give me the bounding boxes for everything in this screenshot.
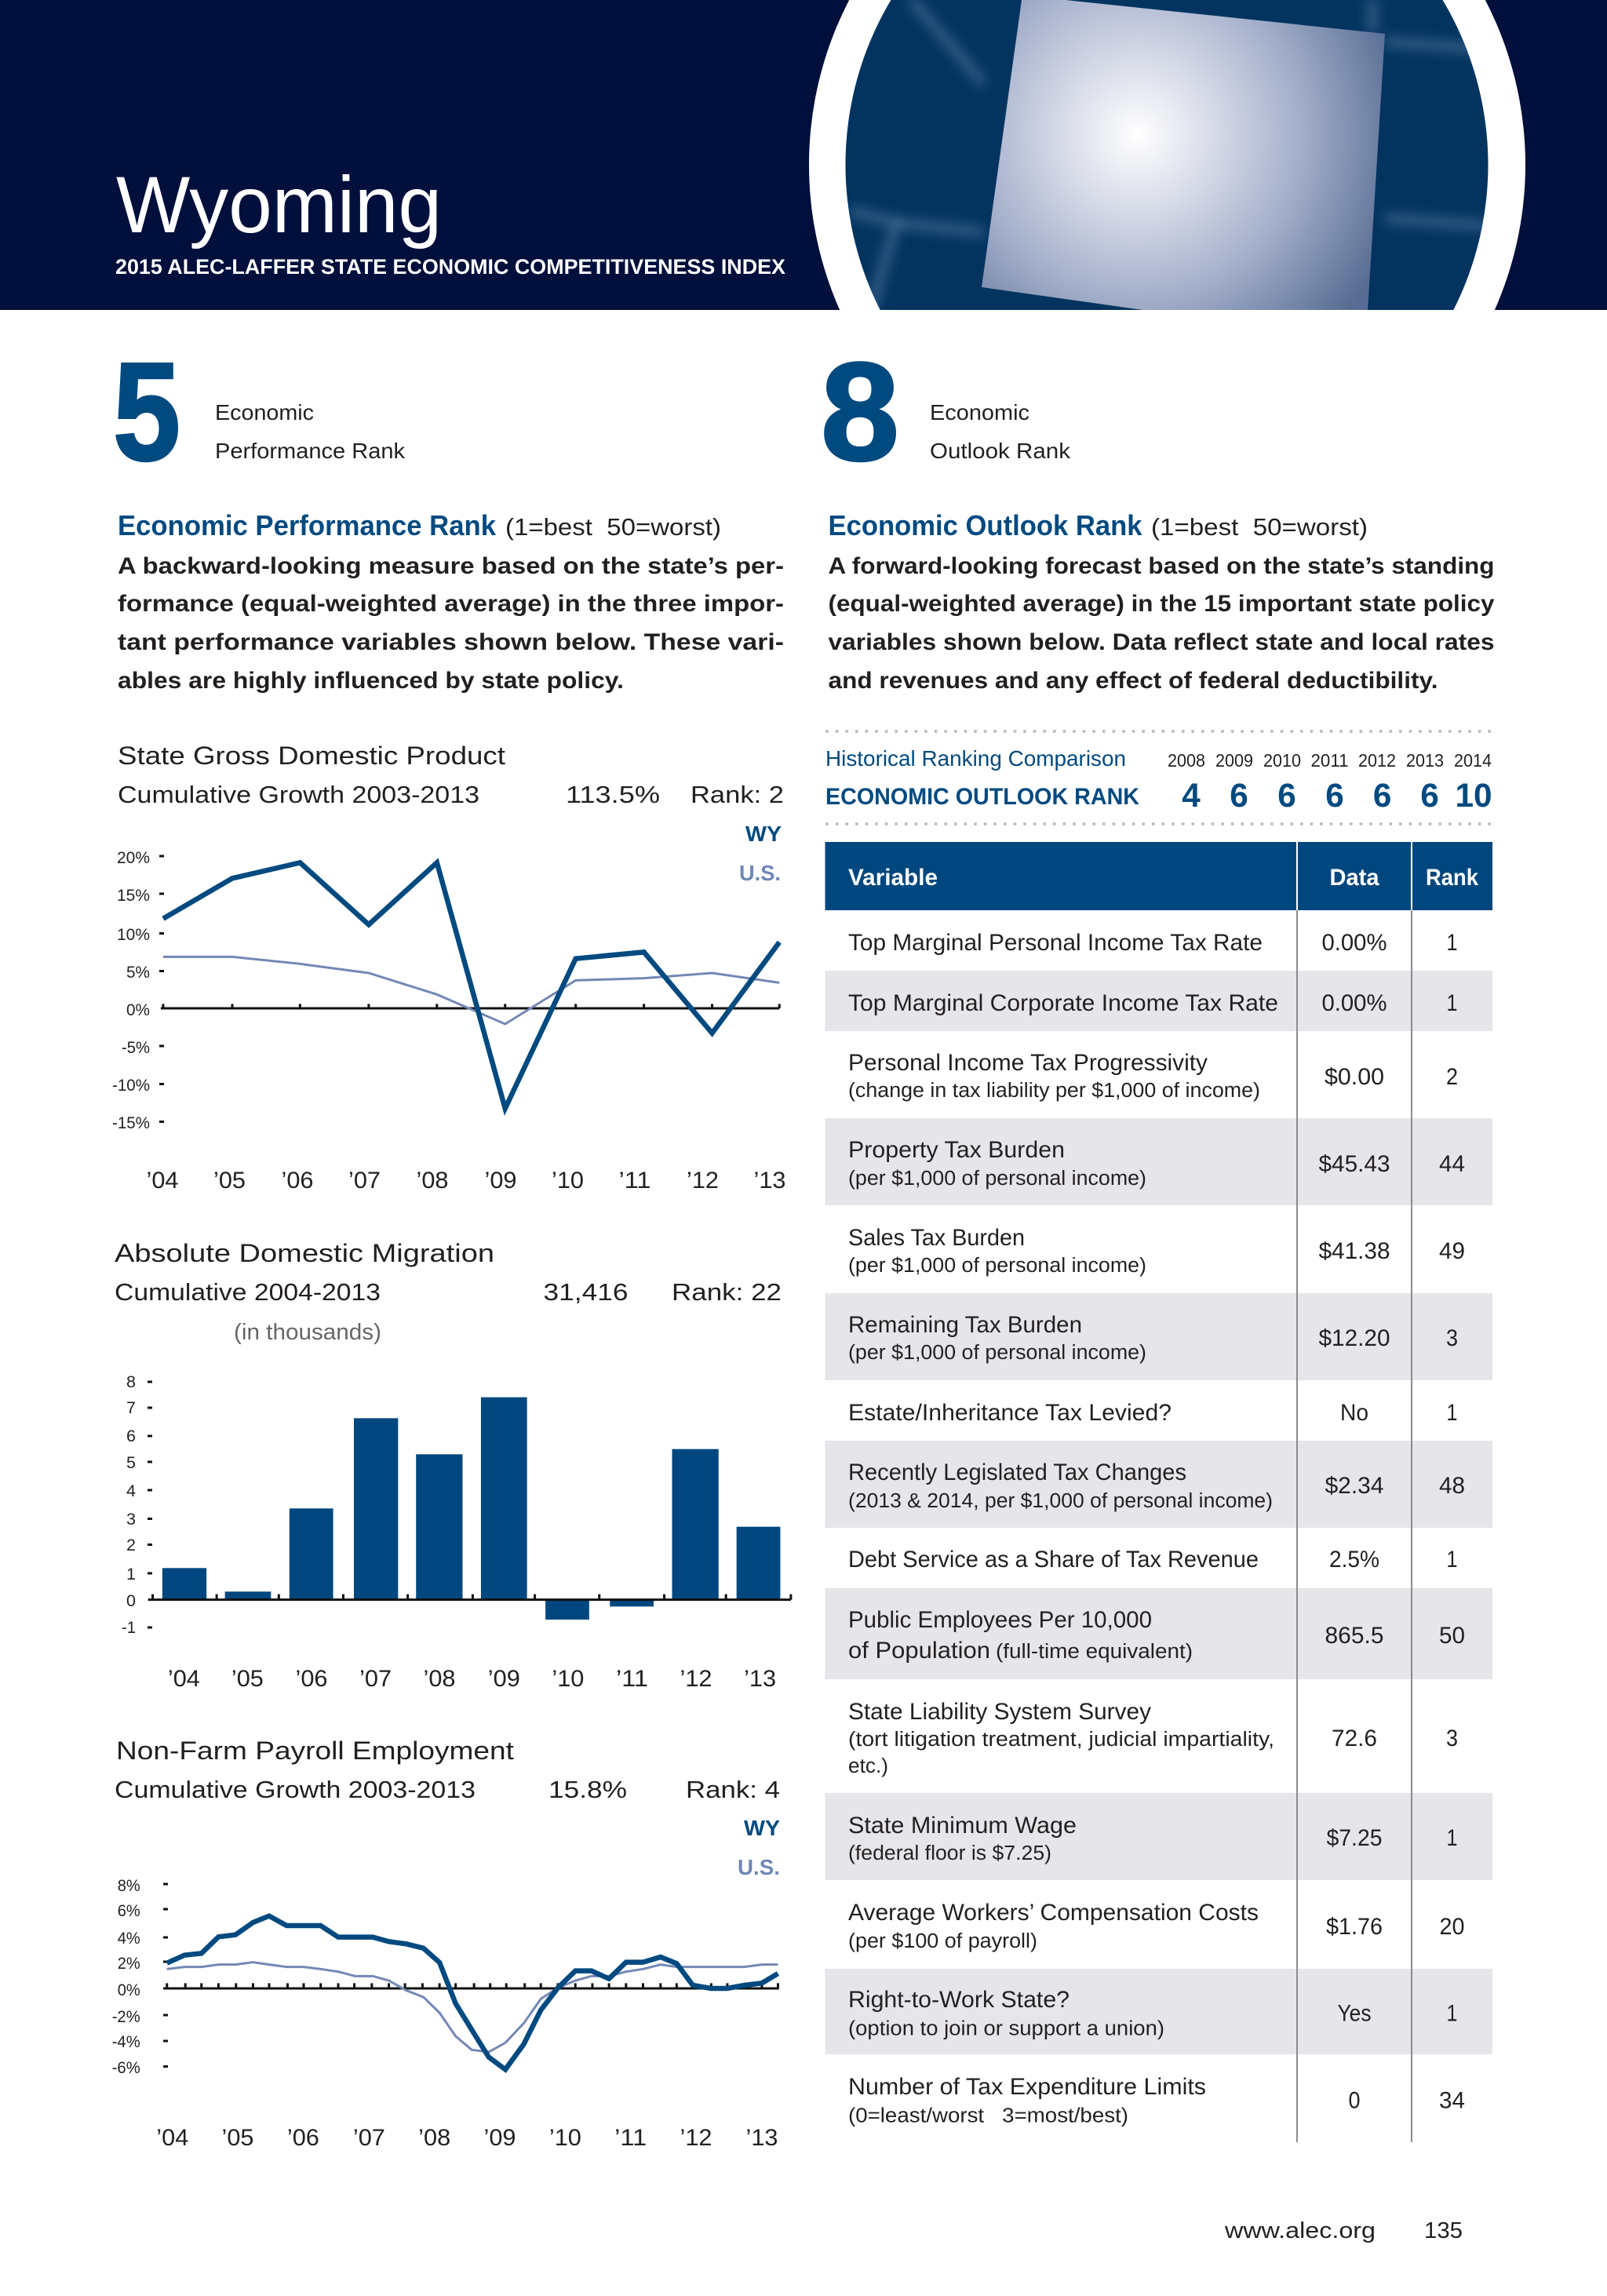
row: public employees per 10,000 of population: of Population [848, 1638, 990, 1664]
zero axis [161, 1004, 779, 1008]
text block: economic outlook rank description [829, 509, 1495, 694]
chart heading: absolute domestic migration: Rank: 22 [672, 1278, 782, 1306]
x axis labels: ’09 [488, 1666, 520, 1692]
row: right-to-work state [848, 1987, 1458, 2040]
historical ranking comparison [825, 731, 1492, 824]
text block: economic performance rank description: (1=best 50=worst) [505, 514, 721, 541]
y axis labels: -15% [112, 1113, 150, 1132]
x axis labels: ’09 [485, 1168, 516, 1194]
y axis labels: 20% [117, 848, 150, 867]
y axis labels: 7 [126, 1398, 136, 1417]
text block: economic performance rank description: Economic Performance Rank [118, 509, 497, 541]
series: U.S. [163, 957, 779, 1024]
historical ranking comparison: 4 [1182, 777, 1201, 815]
y axis labels: 4 [126, 1481, 136, 1500]
row: number of tax expenditure limits: 34 [1439, 2087, 1465, 2114]
chart heading: non-farm payroll employment: 15.8% [548, 1776, 627, 1803]
row: state liability system survey: (tort litigation treatment, judicial impartiality, [848, 1729, 1274, 1751]
y axis labels: 2 [126, 1536, 136, 1554]
legend: WY and U.S. [738, 1816, 780, 1879]
text block: economic outlook rank description: and revenues and any effect of federal deductibility. [829, 668, 1438, 694]
text block: economic performance rank description: formance (equal-weighted average) in the three impor- [118, 591, 784, 617]
zero axis [163, 1983, 779, 1988]
x axis labels: ’10 [552, 1168, 584, 1194]
footer: website and page number: 135 [1424, 2218, 1463, 2243]
footer: website and page number: www.alec.org [1224, 2218, 1376, 2243]
row: number of tax expenditure limits: (0=least/worst 3=most/best) [848, 2105, 1128, 2127]
x axis labels: ’09 [483, 2125, 516, 2151]
text block: economic performance rank description: tant performance variables shown below. These vari- [118, 629, 784, 655]
header banner [0, 0, 1607, 310]
chart heading: absolute domestic migration: (in thousands) [234, 1320, 381, 1345]
x axis labels: ’12 [680, 2125, 712, 2151]
row: right-to-work state: Right-to-Work State? [848, 1987, 1070, 2013]
row: debt service as a share of tax revenue: 1 [1447, 1547, 1458, 1573]
title: Wyoming [116, 160, 442, 250]
row: recently legislated tax changes: $2.34 [1325, 1473, 1384, 1499]
row: top marginal personal income tax rate: 1 [1447, 930, 1458, 956]
x axis labels: ’07 [353, 2125, 385, 2151]
row: right-to-work state: (option to join or support a union) [848, 2018, 1164, 2040]
x axis labels [156, 2125, 778, 2151]
historical ranking comparison: 6 [1230, 777, 1248, 815]
historical ranking comparison: 2014 [1454, 750, 1492, 771]
row: state minimum wage: (federal floor is $7.25) [848, 1842, 1051, 1864]
bar chart: absolute domestic migration [122, 1372, 791, 1692]
row: state liability system survey: etc.) [848, 1755, 888, 1777]
row: property tax burden: $45.43 [1318, 1151, 1390, 1177]
table header: Variable [848, 865, 938, 891]
row: right-to-work state: Yes [1337, 2001, 1372, 2026]
y axis labels: -4% [112, 2032, 140, 2051]
table header: Rank [1426, 865, 1478, 891]
legend: WY and U.S.: WY [745, 822, 782, 846]
row: remaining tax burden: (per $1,000 of personal income) [848, 1342, 1146, 1364]
row: average workers' compensation costs [848, 1900, 1464, 1952]
row: debt service as a share of tax revenue [848, 1547, 1458, 1573]
historical ranking comparison: 6 [1277, 777, 1296, 815]
row: property tax burden: Property Tax Burden [848, 1137, 1065, 1163]
zero axis [148, 1594, 791, 1600]
historical ranking comparison: Historical Ranking Comparison [825, 746, 1126, 771]
text block: economic outlook rank description: (equal-weighted average) in the 15 important state policy [829, 591, 1495, 617]
x axis labels: ’07 [359, 1666, 392, 1692]
row: top marginal corporate income tax rate: Top Marginal Corporate Income Tax Rate [848, 990, 1278, 1016]
y axis labels: -2% [112, 2007, 140, 2026]
x axis labels: ’05 [221, 2125, 254, 2151]
row: public employees per 10,000 of population: Public Employees Per 10,000 [848, 1607, 1152, 1633]
y axis labels: 0% [118, 1981, 140, 1999]
row: estate/inheritance tax levied [848, 1400, 1458, 1426]
row: state minimum wage: 1 [1447, 1825, 1458, 1851]
historical ranking comparison: 2010 [1263, 750, 1301, 771]
y axis labels: 4% [118, 1929, 140, 1948]
y axis labels: 2% [118, 1954, 140, 1973]
rank badge: economic performance 5: Performance Rank [215, 439, 406, 463]
x axis labels [168, 1666, 776, 1692]
rank badge: economic outlook 8: Outlook Rank [930, 439, 1071, 463]
row: recently legislated tax changes: (2013 & 2014, per $1,000 of personal income) [848, 1490, 1273, 1512]
historical ranking comparison: 2011 [1310, 750, 1348, 771]
row: state liability system survey: 72.6 [1332, 1726, 1377, 1751]
rank badge: economic performance 5: 5 [113, 333, 180, 490]
row: average workers' compensation costs: $1.76 [1326, 1914, 1383, 1940]
chart heading: absolute domestic migration: Cumulative 2004-2013 [115, 1278, 381, 1306]
series: U.S. [167, 1963, 778, 2052]
chart heading: non-farm payroll employment: Cumulative Growth 2003-2013 [115, 1776, 476, 1803]
x axis labels: ’13 [744, 1666, 776, 1692]
historical ranking comparison: 2012 [1358, 750, 1396, 771]
chart heading: state gross domestic product: State Gross Domestic Product [118, 742, 505, 770]
chart heading: state gross domestic product: 113.5% [566, 781, 660, 808]
x axis labels: ’04 [168, 1666, 200, 1692]
x axis labels: ’08 [418, 2125, 450, 2151]
y axis labels: 3 [126, 1510, 136, 1529]
historical ranking comparison: 2013 [1406, 750, 1444, 771]
legend: WY and U.S.: WY [744, 1816, 780, 1840]
text block: economic outlook rank description: A forward-looking forecast based on the state’s standing [829, 553, 1494, 579]
row: personal income tax progressivity: Personal Income Tax Progressivity [848, 1050, 1208, 1076]
table header [825, 842, 1492, 910]
historical ranking comparison: 2008 [1168, 750, 1205, 771]
x axis labels: ’05 [213, 1168, 246, 1194]
row: sales tax burden: $41.38 [1318, 1238, 1390, 1264]
row: sales tax burden: Sales Tax Burden [848, 1225, 1025, 1251]
row: estate/inheritance tax levied: Estate/Inheritance Tax Levied? [848, 1400, 1172, 1426]
text block: economic performance rank description: A backward-looking measure based on the state’s per- [118, 553, 784, 579]
row: state minimum wage: State Minimum Wage [848, 1813, 1077, 1839]
x axis labels: ’13 [753, 1168, 786, 1194]
x axis labels: ’07 [348, 1168, 381, 1194]
row: top marginal personal income tax rate: 0.00% [1321, 930, 1387, 956]
subtitle: 2015 ALEC-LAFFER STATE ECONOMIC COMPETITIVENESS INDEX [115, 255, 785, 279]
row: personal income tax progressivity: 2 [1446, 1064, 1458, 1090]
row: sales tax burden: (per $1,000 of personal income) [848, 1255, 1146, 1277]
y axis labels: -10% [112, 1076, 150, 1095]
row: top marginal personal income tax rate [848, 930, 1458, 956]
y axis labels: 0% [126, 1000, 150, 1019]
row: state liability system survey: State Liability System Survey [848, 1699, 1151, 1725]
rank badge: economic outlook 8: 8 [821, 333, 899, 490]
y axis labels: 5% [126, 963, 150, 982]
row: recently legislated tax changes: 48 [1439, 1473, 1465, 1499]
y axis labels: -6% [112, 2058, 140, 2077]
y axis labels: -1 [122, 1618, 136, 1637]
row: personal income tax progressivity: (change in tax liability per $1,000 of income) [848, 1080, 1260, 1102]
y axis labels: 10% [117, 925, 150, 944]
row: remaining tax burden: 3 [1446, 1325, 1458, 1351]
historical ranking comparison: 10 [1455, 777, 1492, 815]
footer: website and page number [1224, 2218, 1463, 2243]
row: debt service as a share of tax revenue: 2.5% [1329, 1547, 1379, 1573]
historical ranking comparison: ECONOMIC OUTLOOK RANK [825, 784, 1140, 810]
row: remaining tax burden: $12.20 [1318, 1325, 1390, 1351]
text block: economic outlook rank description: variables shown below. Data reflect state and local rates [829, 629, 1494, 655]
series: WY [167, 1916, 778, 2069]
x axis labels: ’10 [552, 1666, 584, 1692]
row: recently legislated tax changes [848, 1460, 1465, 1512]
row: state minimum wage [848, 1813, 1458, 1864]
y axis labels [112, 1876, 140, 2077]
row: top marginal personal income tax rate: Top Marginal Personal Income Tax Rate [848, 930, 1263, 956]
row: estate/inheritance tax levied: 1 [1447, 1400, 1458, 1426]
x axis labels: ’06 [281, 1168, 314, 1194]
row: property tax burden: 44 [1439, 1151, 1465, 1177]
row: average workers' compensation costs: Average Workers’ Compensation Costs [848, 1900, 1259, 1926]
x axis labels: ’11 [616, 1666, 648, 1692]
x axis labels: ’06 [287, 2125, 319, 2151]
chart heading: non-farm payroll employment [115, 1737, 780, 1803]
y axis labels: 8 [126, 1372, 136, 1391]
table: policy variables [825, 842, 1492, 2142]
x axis labels: ’11 [618, 1168, 651, 1194]
x axis labels: ’10 [549, 2125, 581, 2151]
row: top marginal corporate income tax rate: 1 [1447, 990, 1458, 1016]
rank badge: economic performance 5: Economic [215, 400, 314, 425]
row: average workers' compensation costs: (per $100 of payroll) [848, 1930, 1037, 1952]
x axis labels: ’11 [614, 2125, 647, 2151]
x axis labels: ’06 [295, 1666, 328, 1692]
row: sales tax burden [848, 1225, 1465, 1277]
y axis labels: 6 [126, 1427, 136, 1445]
row: number of tax expenditure limits [848, 2074, 1465, 2127]
line chart: non-farm payroll employment [112, 1816, 780, 2151]
row: public employees per 10,000 of population: (full-time equivalent) [996, 1641, 1193, 1663]
row: personal income tax progressivity: $0.00 [1325, 1064, 1384, 1090]
row: remaining tax burden: Remaining Tax Burden [848, 1312, 1082, 1338]
y axis labels: 5 [126, 1453, 136, 1472]
row: number of tax expenditure limits: Number of Tax Expenditure Limits [848, 2074, 1206, 2100]
series: WY [163, 862, 779, 1109]
chart heading: non-farm payroll employment: Non-Farm Payroll Employment [116, 1737, 514, 1765]
row: top marginal corporate income tax rate: 0.00% [1321, 990, 1387, 1016]
bars [162, 1398, 780, 1620]
historical ranking comparison: 6 [1373, 777, 1391, 815]
row: recently legislated tax changes: Recently Legislated Tax Changes [848, 1460, 1186, 1485]
row: state liability system survey: 3 [1446, 1726, 1458, 1751]
state map medallion [809, 0, 1525, 310]
rank badge: economic outlook 8: Economic [930, 400, 1029, 425]
chart heading: state gross domestic product: Rank: 2 [691, 781, 784, 808]
historical ranking comparison: 6 [1420, 777, 1439, 815]
row: public employees per 10,000 of population [848, 1607, 1465, 1664]
y axis labels: 8% [118, 1876, 140, 1895]
chart heading: state gross domestic product: Cumulative Growth 2003-2013 [118, 781, 479, 808]
table header: Data [1329, 865, 1379, 891]
row: public employees per 10,000 of population: 865.5 [1325, 1623, 1384, 1649]
row: state liability system survey [848, 1699, 1458, 1777]
chart heading: non-farm payroll employment: Rank: 4 [686, 1776, 780, 1803]
row: number of tax expenditure limits: 0 [1348, 2087, 1361, 2114]
x axis labels: ’08 [416, 1168, 449, 1194]
x axis labels [146, 1168, 786, 1194]
legend: WY and U.S.: U.S. [739, 861, 781, 885]
x axis labels: ’12 [680, 1666, 712, 1692]
historical ranking comparison: 6 [1325, 777, 1344, 815]
y axis labels: 0 [126, 1591, 136, 1610]
row: state minimum wage: $7.25 [1326, 1825, 1383, 1851]
row: property tax burden: (per $1,000 of personal income) [848, 1168, 1146, 1190]
rank badge: economic performance 5 [113, 333, 406, 490]
y axis labels: 15% [117, 886, 150, 905]
y axis labels: 6% [118, 1901, 140, 1920]
legend: WY and U.S.: U.S. [738, 1855, 780, 1879]
row: public employees per 10,000 of population: 50 [1439, 1623, 1465, 1649]
text block: economic performance rank description [118, 509, 784, 694]
y axis labels [112, 848, 150, 1132]
y axis labels: -5% [122, 1038, 150, 1057]
text block: economic outlook rank description: (1=best 50=worst) [1151, 514, 1368, 541]
chart heading: absolute domestic migration: Absolute Domestic Migration [115, 1239, 494, 1267]
chart heading: state gross domestic product [118, 742, 784, 808]
row: right-to-work state: 1 [1447, 2001, 1458, 2026]
row: property tax burden [848, 1137, 1465, 1190]
x axis labels: ’05 [231, 1666, 264, 1692]
x axis labels: ’13 [745, 2125, 778, 2151]
x axis labels: ’04 [156, 2125, 188, 2151]
y axis labels: 1 [126, 1565, 136, 1584]
row: average workers' compensation costs: 20 [1439, 1914, 1464, 1940]
chart heading: absolute domestic migration: 31,416 [543, 1278, 628, 1306]
legend: WY and U.S. [739, 822, 782, 885]
row: remaining tax burden [848, 1312, 1458, 1364]
line chart: state gross domestic product [112, 822, 786, 1194]
row: sales tax burden: 49 [1439, 1238, 1465, 1264]
row: personal income tax progressivity [848, 1050, 1458, 1102]
x axis labels: ’12 [687, 1168, 719, 1194]
x axis labels: ’04 [146, 1168, 179, 1194]
y axis labels [122, 1372, 136, 1637]
chart heading: absolute domestic migration [115, 1239, 782, 1345]
x axis labels: ’08 [424, 1666, 455, 1692]
text block: economic performance rank description: ables are highly influenced by state policy. [118, 668, 624, 694]
row: estate/inheritance tax levied: No [1340, 1400, 1368, 1426]
text block: economic outlook rank description: Economic Outlook Rank [829, 509, 1142, 541]
rank badge: economic outlook 8 [821, 333, 1071, 490]
historical ranking comparison: 2009 [1215, 750, 1253, 771]
row: debt service as a share of tax revenue: Debt Service as a Share of Tax Revenue [848, 1547, 1259, 1573]
